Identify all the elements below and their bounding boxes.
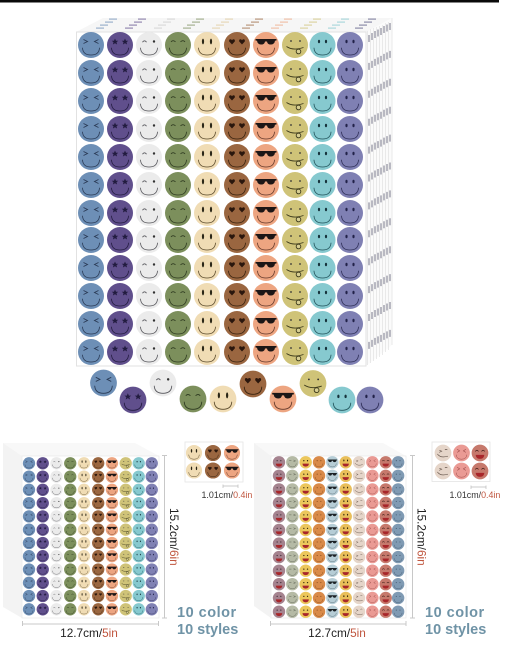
caption: 10 color 10 styles: 10 color bbox=[425, 605, 485, 621]
pack sticker grid bbox=[23, 457, 158, 615]
panel: main sticker stack bbox=[76, 18, 392, 366]
caption: 10 color 10 styles bbox=[425, 605, 486, 638]
caption: 10 color 10 styles bbox=[177, 605, 238, 638]
sticker grid: 10 styles by 12 rows bbox=[78, 32, 363, 365]
pack box faces bbox=[3, 443, 159, 618]
height dimension bbox=[410, 456, 428, 618]
height dimension bbox=[162, 456, 181, 618]
width dimension: 12.7cm/5in bbox=[308, 626, 366, 640]
stack top edge of sheets bbox=[76, 18, 392, 32]
caption: 10 color 10 styles: 10 styles bbox=[177, 622, 238, 638]
caption: 10 color 10 styles: 10 styles bbox=[425, 622, 486, 638]
stack right edge of sheets bbox=[366, 18, 392, 366]
pack sticker grid bbox=[273, 456, 404, 618]
front sheet bbox=[76, 32, 366, 366]
sticker size swatch: 1.01cm/0.4in bbox=[202, 490, 252, 500]
sticker size swatch: 1.01cm/0.4in bbox=[450, 490, 500, 500]
loose sample stickers bbox=[90, 370, 383, 413]
sticker size swatch bbox=[432, 442, 500, 500]
panel: left sticker pack bbox=[3, 442, 252, 640]
height dimension: 15.2cm/ 6in bbox=[414, 508, 428, 566]
width dimension bbox=[270, 621, 406, 640]
pack box faces bbox=[254, 443, 406, 618]
panel: right sticker pack bbox=[254, 442, 500, 640]
sticker size swatch bbox=[185, 442, 252, 500]
width dimension bbox=[22, 621, 158, 640]
height dimension: 15.2cm/ 6in bbox=[167, 508, 181, 566]
width dimension: 12.7cm/5in bbox=[60, 626, 118, 640]
caption: 10 color 10 styles: 10 color bbox=[177, 605, 237, 621]
top black bar bbox=[0, 0, 499, 2]
